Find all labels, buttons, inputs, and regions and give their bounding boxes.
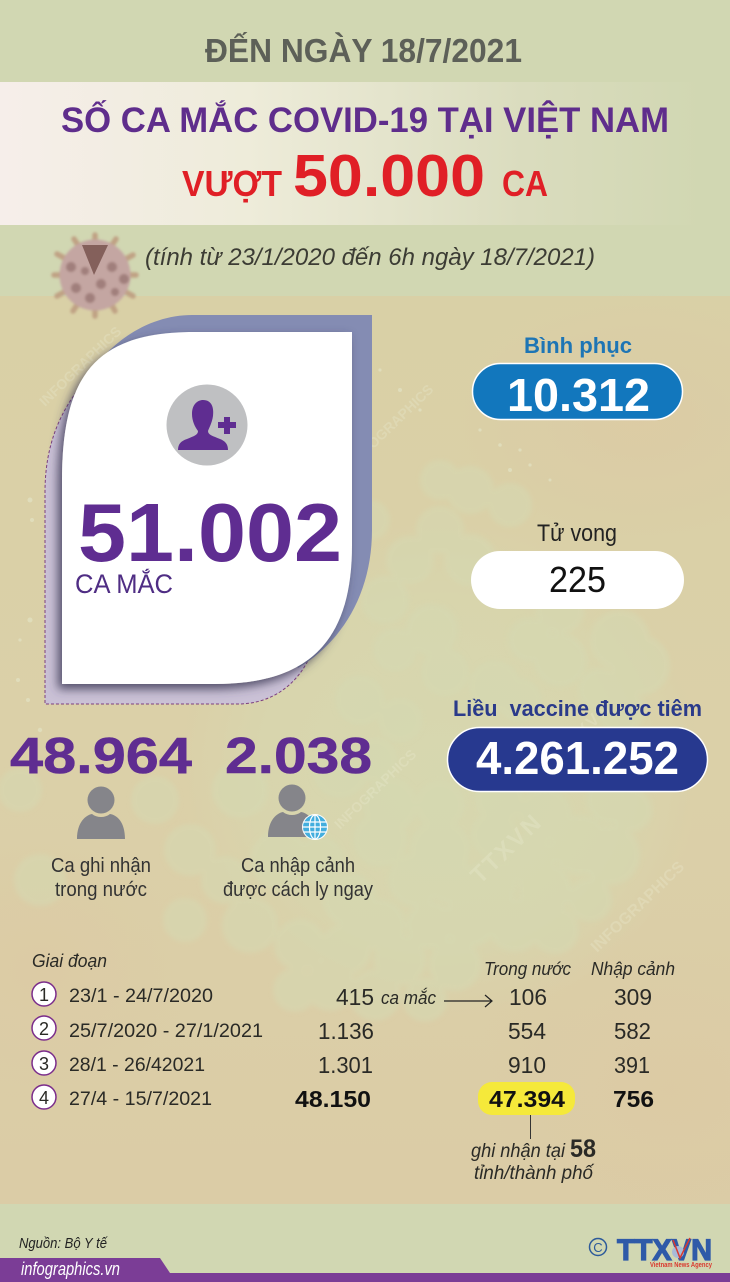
domestic column: [489, 984, 565, 1112]
watermarks: [36, 323, 688, 956]
footer bar: [0, 1258, 730, 1282]
stat: domestic cases: [10, 727, 193, 901]
source: Nguồn: Bộ Y tế: [19, 1235, 108, 1252]
domestic column: 106: [509, 984, 547, 1010]
row dates: 27/4 - 15/7/2021: [69, 1089, 212, 1110]
row dates: 23/1 - 24/7/2020: [69, 986, 213, 1007]
stat: domestic cases: 48.964: [10, 727, 193, 784]
imported column: 391: [614, 1052, 650, 1078]
icon: person: [77, 786, 125, 839]
panel: total cases card: [45, 315, 372, 704]
table header: Trong nước: [484, 959, 571, 979]
row totals: 1.136: [318, 1018, 374, 1044]
domestic highlight pill: [478, 1082, 575, 1115]
row totals: [295, 984, 374, 1112]
domestic column: 47.394: [489, 1086, 565, 1112]
watermarks: TTXVN: [465, 808, 548, 889]
arrow: [444, 995, 492, 1007]
watermarks: INFOGRAPHICS: [91, 616, 179, 702]
callout: 58 provinces: tỉnh/thành phố: [474, 1163, 594, 1184]
stat: imported cases: 2.038: [225, 727, 372, 784]
row numbers: [32, 982, 56, 1109]
heading: date: ĐẾN NGÀY 18/7/2021: [205, 32, 522, 69]
total label: CA MẮC: [75, 568, 173, 599]
row totals: 48.150: [295, 1086, 371, 1112]
watermarks: TTXVN: [555, 699, 615, 758]
table: cases by period: [32, 951, 675, 1184]
stat: recovered: [472, 333, 682, 421]
stat: deaths: [471, 520, 684, 609]
stat: deaths: 225: [549, 559, 606, 600]
stat: imported cases: được cách ly ngay: [223, 879, 373, 901]
imported column: [613, 984, 654, 1112]
row numbers: 1: [39, 985, 49, 1005]
title line 1: SỐ CA MẮC COVID-19 TẠI VIỆT NAM: [61, 100, 669, 140]
watermarks: INFOGRAPHICS: [348, 381, 436, 467]
watermarks: INFOGRAPHICS: [588, 858, 688, 956]
row numbers: 2: [39, 1019, 49, 1039]
stat: domestic cases: trong nước: [55, 879, 147, 901]
total number: 51.002: [78, 486, 342, 579]
footer strip: [0, 1204, 730, 1282]
stat: imported cases: Ca nhập cảnh: [241, 855, 355, 877]
background: header strip: [0, 0, 730, 296]
title line 2: CA: [502, 163, 548, 204]
stat: recovered: Bình phục: [524, 333, 632, 358]
background: virus texture panel: [0, 290, 730, 1260]
domestic column: 910: [508, 1052, 546, 1078]
row numbers: 3: [39, 1054, 49, 1074]
callout: 58 provinces: ghi nhận tại: [471, 1141, 566, 1162]
imported column: 756: [613, 1086, 654, 1112]
stat: domestic cases: Ca ghi nhận: [51, 855, 151, 877]
title line 2: VƯỢT: [182, 163, 282, 204]
title band: [0, 82, 700, 225]
table header: Giai đoạn: [32, 951, 107, 971]
footer bar: infographics.vn: [21, 1259, 120, 1279]
icon: coronavirus: [54, 235, 136, 316]
subtitle: (tính từ 23/1/2020 đến 6h ngày 18/7/2021): [145, 244, 595, 271]
logo: TTXVN: TTXVN: [617, 1234, 712, 1267]
watermarks: INFOGRAPHICS: [331, 746, 419, 832]
callout: 58 provinces: 58: [570, 1135, 596, 1163]
logo: TTXVN: Vietnam News Agency: [650, 1262, 712, 1269]
row totals: 415: [336, 984, 374, 1010]
icon: person plus: [166, 384, 248, 466]
imported column: 582: [614, 1018, 651, 1044]
logo: TTXVN: C: [593, 1240, 603, 1255]
stat: deaths: Tử vong: [537, 520, 617, 547]
watermarks: INFOGRAPHICS: [36, 323, 124, 409]
stat: vaccine doses: Liều vaccine được tiêm: [453, 696, 702, 721]
title line 2: [182, 143, 548, 209]
table header: Nhập cảnh: [591, 959, 675, 979]
stat: vaccine doses: [448, 696, 708, 792]
callout: 58 provinces: [471, 1115, 596, 1184]
row totals: 1.301: [318, 1052, 373, 1078]
row dates: 28/1 - 26/42021: [69, 1055, 205, 1076]
ca mac note: ca mắc: [381, 988, 436, 1008]
stat: vaccine doses: 4.261.252: [476, 732, 679, 784]
stat: imported cases: [223, 727, 373, 901]
row dates: 25/7/2020 - 27/1/2021: [69, 1021, 263, 1042]
stat: recovered: 10.312: [507, 369, 650, 421]
imported column: 309: [614, 984, 652, 1010]
icon: person with globe: [268, 784, 328, 840]
row dates: [69, 986, 263, 1110]
table header: [32, 951, 675, 979]
title line 2: 50.000: [293, 143, 485, 209]
row numbers: 4: [39, 1088, 49, 1108]
domestic column: 554: [508, 1018, 546, 1044]
